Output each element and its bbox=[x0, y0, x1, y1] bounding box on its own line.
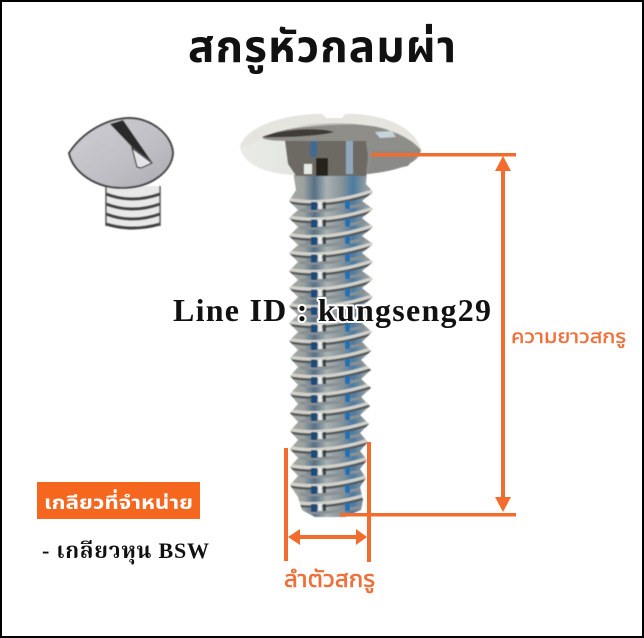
screw neck bbox=[285, 141, 368, 176]
label: shaft diameter: ลำตัวสกรู bbox=[284, 566, 375, 594]
title: สกรูหัวกลมผ่า bbox=[188, 23, 456, 74]
watermark: line id: Line ID : kungseng29 bbox=[173, 292, 491, 328]
screw photo bbox=[240, 114, 421, 520]
dimension: screw length bbox=[340, 153, 516, 516]
screw shaft with threads bbox=[285, 170, 377, 520]
screw head bbox=[240, 114, 421, 175]
text: thread type: - เกลียวหุน BSW bbox=[42, 538, 209, 565]
badge: threads sold bbox=[37, 482, 200, 519]
dimension: shaft diameter bbox=[284, 442, 371, 562]
icon: slotted round head screw bbox=[69, 118, 173, 228]
badge: threads sold: เกลียวที่จำหน่าย bbox=[44, 489, 193, 514]
label: screw length: ความยาวสกรู bbox=[511, 327, 626, 349]
